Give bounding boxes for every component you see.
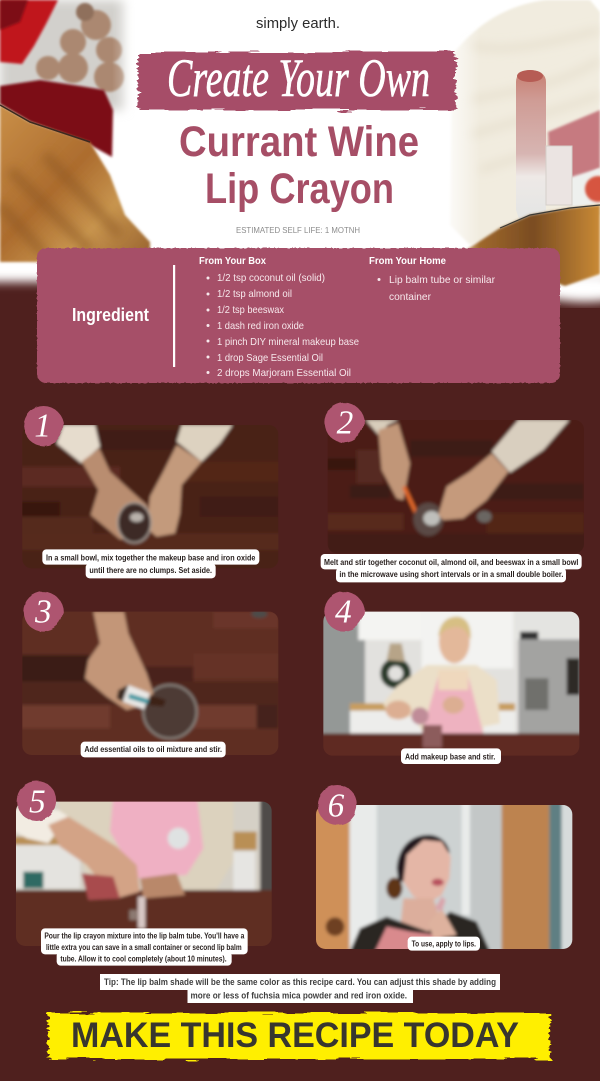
photo: pouring mixture into tube	[16, 802, 272, 946]
panel: ingredients	[37, 248, 560, 383]
number badge	[324, 403, 364, 443]
number badge	[17, 781, 57, 821]
caption: To use, apply to lips.	[412, 939, 476, 948]
number badge	[23, 592, 63, 632]
from your box list: 1 dash red iron oxide	[217, 320, 304, 332]
caption	[81, 742, 226, 757]
photo: hands mixing in a bowl	[22, 425, 278, 549]
second tube	[548, 110, 600, 186]
from your box list: From Your Box	[199, 255, 266, 267]
number badge: 2	[337, 404, 353, 441]
caption: In a small bowl, mix together the makeup base and iron oxide	[46, 553, 256, 562]
shelf life note: ESTIMATED SELF LIFE: 1 MOTNH	[236, 225, 360, 235]
photo: lip crayon tubes on linen at right	[420, 0, 600, 286]
number badge: 5	[29, 783, 46, 820]
banner: Create Your Own: Create Your Own	[167, 48, 430, 108]
photo: woman in kitchen adding makeup base	[323, 612, 580, 756]
wooden board	[0, 105, 150, 262]
from your box list: 1 drop Sage Essential Oil	[217, 352, 323, 364]
banner: Create Your Own	[138, 48, 456, 110]
ingredient heading: Ingredient	[72, 305, 149, 325]
number badge	[317, 785, 357, 825]
photo: rose, beads and wooden board on the left	[0, 0, 158, 262]
caption	[401, 748, 501, 764]
photo: melting oils in a bowl	[328, 420, 584, 553]
step 3	[17, 592, 283, 762]
wooden board	[466, 205, 600, 286]
red cloth	[0, 80, 113, 157]
caption	[42, 549, 259, 578]
step 5	[10, 781, 277, 966]
caption: tube. Allow it to cool completely (about 10 minutes).	[60, 955, 227, 964]
caption: Pour the lip crayon mixture into the lip balm tube. You'll have a	[44, 931, 245, 940]
caption: Add makeup base and stir.	[405, 752, 495, 761]
number badge: 1	[34, 408, 51, 445]
number badge: 3	[34, 594, 52, 631]
step 1	[17, 406, 283, 578]
title: Currant Wine	[179, 118, 419, 166]
call to action banner: MAKE THIS RECIPE TODAY	[71, 1016, 519, 1055]
wooden beads	[36, 3, 124, 92]
caption	[41, 928, 248, 966]
from your home list	[369, 255, 495, 303]
clear tube cap	[546, 146, 572, 205]
number badge: 6	[328, 787, 345, 824]
from your box list: 1 pinch DIY mineral makeup base	[217, 336, 359, 348]
number badge: 4	[335, 594, 352, 631]
header white backdrop	[0, 0, 600, 302]
caption: Melt and stir together coconut oil, almond oil, and beeswax in a small bowl	[324, 558, 578, 567]
from your box list	[199, 255, 359, 379]
photo: woman applying lip crayon	[316, 805, 572, 949]
linen cloth	[450, 0, 600, 245]
from your home list: From Your Home	[369, 255, 446, 267]
tip note: Tip: The lip balm shade will be the same color as this recipe card. You can adjust this shade by adding	[104, 977, 496, 987]
caption	[321, 554, 582, 582]
number badge	[324, 592, 364, 632]
from your box list: 1/2 tsp coconut oil (solid)	[217, 272, 325, 284]
from your box list: 1/2 tsp almond oil	[217, 288, 292, 300]
number badge	[24, 406, 64, 446]
red rose	[0, 0, 58, 64]
step 2	[320, 403, 590, 582]
rose decoration	[585, 176, 600, 202]
tip note	[100, 974, 500, 1003]
caption: in the microwave using short intervals or in a small double boiler.	[339, 570, 563, 579]
from your home list: container	[389, 291, 431, 303]
main lip crayon tube	[516, 70, 546, 222]
from your box list: 1/2 tsp beeswax	[217, 304, 285, 316]
caption: Add essential oils to oil mixture and stir.	[84, 745, 222, 754]
tip note: more or less of fuchsia mica powder and red iron oxide.	[190, 990, 407, 1000]
caption	[408, 937, 480, 951]
step 4	[317, 592, 587, 764]
title: Lip Crayon	[205, 165, 394, 213]
brand logo: simply earth.	[256, 16, 340, 32]
photo: adding essential oils	[22, 612, 278, 755]
from your box list: 2 drops Marjoram Essential Oil	[217, 367, 351, 379]
from your home list: Lip balm tube or similar	[389, 274, 495, 286]
step 6	[310, 785, 580, 955]
title	[179, 118, 419, 213]
caption: until there are no clumps. Set aside.	[89, 566, 212, 575]
caption: little extra you can save in a small container or second lip balm	[46, 943, 242, 952]
